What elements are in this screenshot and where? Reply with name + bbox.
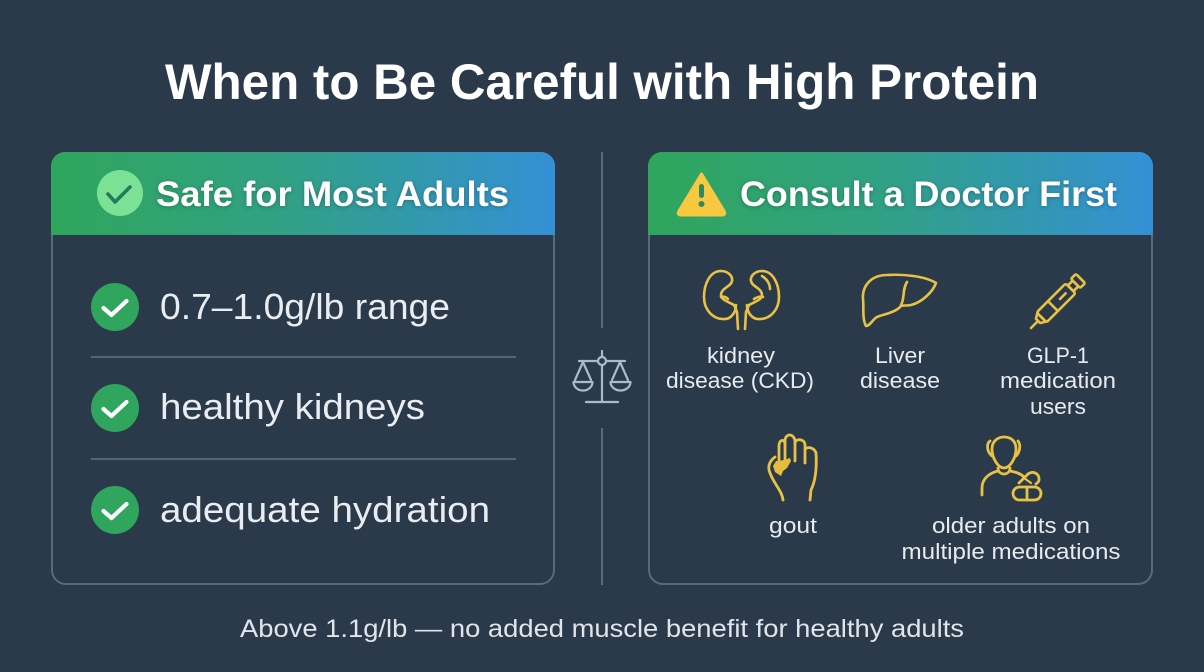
item: liver disease: Liver — [875, 343, 925, 368]
item: older adults on multiple medications: older adults on — [932, 513, 1090, 538]
item: adequate hydration: adequate hydration — [160, 489, 490, 530]
item: kidney disease — [666, 271, 814, 393]
item: GLP-1 medication users: GLP-1 — [1027, 343, 1089, 368]
item: kidney disease: kidney — [707, 343, 775, 368]
item: older adults on multiple medications: multiple medications — [902, 539, 1120, 564]
item: healthy kidneys — [91, 384, 425, 432]
item: GLP-1 medication users: users — [1030, 394, 1086, 419]
footnote: Above 1.1g/lb — no added muscle benefit for healthy adults — [240, 615, 964, 643]
title: When to Be Careful with High Protein — [165, 54, 1039, 110]
icon: injection pen — [1026, 274, 1085, 333]
icon: hand with gout joint — [769, 435, 816, 500]
panel header: safe — [51, 152, 555, 235]
item: older adults on multiple medications — [902, 437, 1120, 564]
item: GLP-1 medication users: medication — [1000, 368, 1116, 393]
icon: warning triangle — [678, 174, 725, 215]
panel header: consult — [648, 152, 1153, 235]
item: gout: gout — [769, 513, 817, 538]
item: gout — [769, 435, 817, 538]
icon: balance scales — [574, 351, 630, 402]
item: kidney disease: disease (CKD) — [666, 368, 814, 393]
item: protein range: 0.7–1.0g/lb range — [160, 286, 450, 327]
divider with scales — [574, 152, 630, 585]
icon: older person with pills — [982, 437, 1041, 500]
item: liver disease — [860, 275, 940, 393]
heading: safe for most adults: Safe for Most Adults — [156, 175, 509, 214]
item: adequate hydration — [91, 486, 490, 534]
panel: consult a doctor first — [648, 152, 1153, 584]
icon: kidneys — [704, 271, 779, 329]
item: protein range — [91, 283, 450, 331]
item: liver disease: disease — [860, 368, 940, 393]
icon: header check badge — [97, 170, 143, 216]
item: healthy kidneys: healthy kidneys — [160, 386, 425, 427]
panel: safe for most adults — [51, 152, 555, 584]
item: GLP-1 medication users — [1000, 274, 1116, 419]
heading: consult a doctor first: Consult a Doctor First — [740, 175, 1117, 214]
icon: liver — [863, 275, 936, 326]
